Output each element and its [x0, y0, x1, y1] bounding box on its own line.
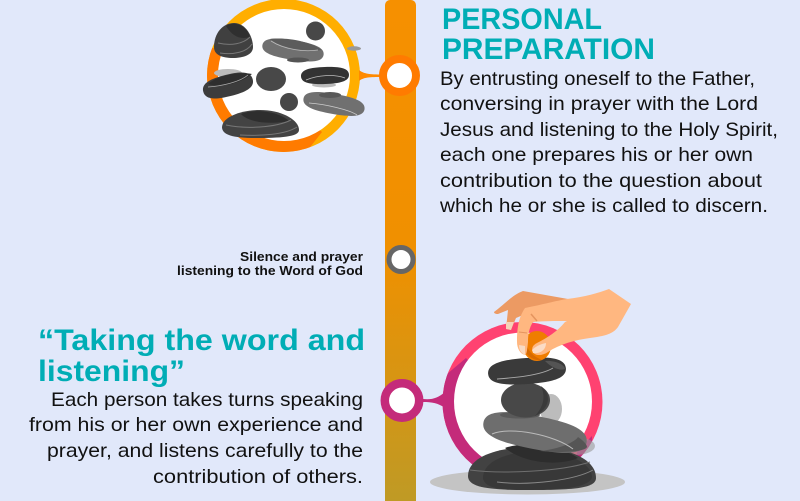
heading: taking the word and listening: listening”	[38, 355, 185, 388]
grey stone	[480, 406, 590, 459]
node: silence and prayer	[389, 248, 413, 272]
text block: taking the word: contribution of others.	[153, 466, 363, 488]
text block: taking the word: prayer, and listens carefully to the	[47, 440, 363, 462]
shadow speck right	[347, 46, 361, 51]
stone: small round lower	[280, 93, 298, 111]
timeline bar	[385, 0, 416, 501]
top illustration: scattered stones in a circle	[200, 0, 382, 160]
heading: taking the word and listening: “Taking the word and	[38, 324, 365, 357]
text block: taking the word: from his or her own experience and	[29, 414, 363, 436]
stone: grey flat right	[302, 89, 366, 119]
text block: personal preparation: conversing in prayer with the Lord	[440, 93, 758, 115]
text block: personal preparation	[439, 68, 778, 217]
stone: large bottom	[222, 110, 299, 138]
node: taking the word	[385, 383, 419, 418]
stone shadows	[540, 394, 562, 424]
connector to node	[423, 392, 445, 408]
large base stone	[468, 445, 596, 490]
caption: silence and prayer	[177, 250, 363, 278]
text block: personal preparation: which he or she is called to discern.	[439, 195, 768, 217]
stone: top small round	[306, 22, 325, 40]
text block: taking the word	[29, 389, 363, 488]
heading: personal preparation	[442, 3, 655, 66]
heading: taking the word and listening	[38, 324, 365, 388]
heading: personal preparation: PREPARATION	[442, 33, 655, 66]
stone: dark flat right	[301, 66, 349, 88]
node: personal preparation	[383, 59, 416, 92]
ring: amber and orange	[200, 0, 360, 160]
text block: taking the word: Each person takes turns speaking	[51, 389, 363, 411]
hand	[494, 289, 631, 355]
ring: pink and magenta	[442, 322, 602, 464]
text block: personal preparation: By entrusting oneself to the Father,	[440, 68, 755, 90]
stone: grey flat top-centre	[261, 35, 325, 65]
text block: personal preparation: Jesus and listening to the Holy Spirit,	[440, 119, 778, 141]
ground shadow	[430, 470, 625, 494]
flat top stone	[487, 355, 567, 387]
text block: personal preparation: each one prepares his or her own	[440, 144, 753, 166]
stone: dark flat left	[201, 69, 255, 102]
bottom illustration: hand stacking stones	[423, 289, 631, 494]
stone: dome top-left	[214, 23, 253, 58]
heading: personal preparation: PERSONAL	[442, 3, 602, 36]
round middle stone	[501, 382, 550, 418]
connector to timeline	[359, 70, 382, 81]
caption: silence and prayer: Silence and prayer	[240, 250, 363, 264]
stone: centre round	[256, 67, 286, 91]
orange pebble	[523, 331, 551, 361]
caption: silence and prayer: listening to the Word of God	[177, 264, 363, 278]
text block: personal preparation: contribution to the question about	[440, 170, 763, 192]
